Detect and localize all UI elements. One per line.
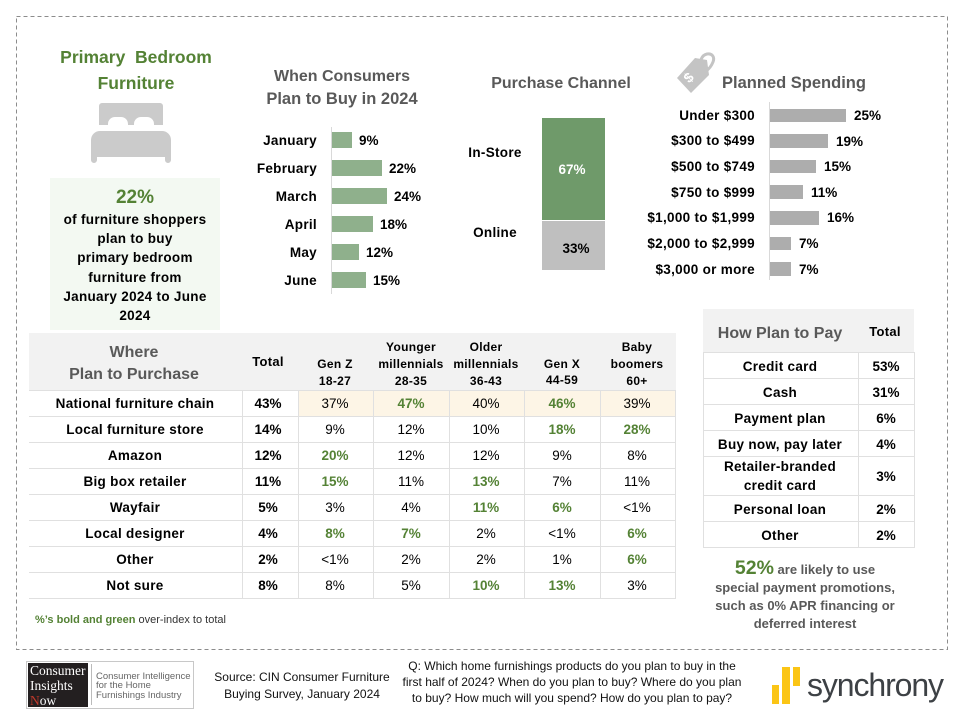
survey question	[403, 659, 741, 705]
table rows: 12%	[397, 422, 425, 437]
bar chart: planned spending: 25%	[854, 108, 881, 123]
table rows: 3%	[627, 578, 647, 593]
table rows: 11%	[255, 474, 281, 489]
bar chart: when consumers plan to buy: 12%	[366, 245, 393, 260]
bar chart: when consumers plan to buy: April	[285, 217, 317, 232]
survey question: Q: Which home furnishings products do you plan to buy in the	[408, 659, 736, 673]
bar chart: when consumers plan to buy	[257, 127, 421, 294]
table rows: 46%	[548, 396, 576, 411]
source note: Source: CIN Consumer Furniture	[214, 670, 390, 684]
column headers: millennials	[378, 357, 444, 371]
table: how plan to pay	[703, 309, 914, 548]
table rows: 2%	[258, 552, 278, 567]
column headers: Older	[470, 340, 502, 354]
table heading: Plan to Purchase	[69, 366, 199, 383]
callout: 52% likely to use promotions: deferred interest	[754, 616, 857, 631]
callout: 22% of furniture shoppers: primary bedroom	[77, 250, 193, 265]
table rows: 8%	[325, 526, 345, 541]
logo: consumer insights now: for the Home	[96, 680, 151, 691]
bar chart: when consumers plan to buy: 9%	[359, 133, 379, 148]
bar chart: when consumers plan to buy: June	[284, 273, 317, 288]
source note: Buying Survey, January 2024	[224, 687, 380, 701]
table rows: 2%	[401, 552, 421, 567]
bar chart: planned spending	[647, 102, 881, 280]
column headers: Baby	[622, 340, 652, 354]
callout: 22% of furniture shoppers: January 2024 to June	[63, 289, 207, 304]
table rows: National furniture chain	[56, 396, 214, 411]
bar chart: planned spending: 11%	[811, 185, 837, 200]
table rows: 9%	[325, 422, 345, 437]
table rows: 12%	[397, 448, 425, 463]
stacked bar chart: purchase channel: 67%	[558, 162, 586, 177]
table rows: Wayfair	[110, 500, 161, 515]
source note	[214, 670, 390, 701]
callout: 22% of furniture shoppers: plan to buy	[97, 231, 173, 246]
table rows: 13%	[548, 578, 576, 593]
bar chart: planned spending: 7%	[799, 236, 819, 251]
bar chart: when consumers plan to buy: January	[263, 133, 317, 148]
table rows: Local furniture store	[66, 422, 204, 437]
table: how plan to pay: 53%	[872, 359, 900, 374]
bar chart: when consumers plan to buy: 24%	[394, 189, 421, 204]
table: how plan to pay: 2%	[876, 502, 896, 517]
table: how plan to pay: Buy now, pay later	[718, 437, 843, 452]
table rows: 8%	[627, 448, 647, 463]
table: where plan to purchase	[29, 333, 676, 598]
logo: consumer insights now: Consumer Intelligence	[96, 671, 191, 682]
column headers: 36-43	[470, 374, 502, 388]
callout: 52% likely to use promotions: 52% are likely to use	[735, 557, 875, 579]
table rows: 18%	[548, 422, 576, 437]
bar chart: when consumers plan to buy: March	[276, 189, 317, 204]
column headers: boomers	[611, 357, 663, 371]
title: primary bedroom furniture	[60, 47, 212, 93]
table rows: 6%	[627, 552, 647, 567]
icon: price tag: $	[680, 69, 697, 86]
column headers: 28-35	[395, 374, 427, 388]
table rows: 14%	[254, 422, 282, 437]
table: how plan to pay: Credit card	[743, 359, 817, 374]
column headers: Total	[252, 354, 284, 369]
heading: when consumers plan to buy: When Consumers	[274, 68, 410, 85]
table: how plan to pay: Other	[761, 528, 799, 543]
table: how plan to pay: Cash	[763, 385, 797, 400]
table rows: 47%	[397, 396, 425, 411]
bar chart: planned spending: $750 to $999	[671, 185, 755, 200]
table rows: 8%	[325, 578, 345, 593]
callout: 22% of furniture shoppers	[50, 178, 220, 330]
table rows: 43%	[254, 396, 282, 411]
bar chart: planned spending: $500 to $749	[671, 159, 755, 174]
table rows: 6%	[552, 500, 572, 515]
heading: when consumers plan to buy	[266, 68, 418, 108]
callout: 22% of furniture shoppers: of furniture shoppers	[64, 212, 206, 227]
table: how plan to pay: How Plan to Pay	[718, 325, 842, 342]
bar chart: planned spending: 7%	[799, 262, 819, 277]
stacked bar chart: purchase channel	[468, 118, 605, 270]
callout: 22% of furniture shoppers: 2024	[119, 308, 151, 323]
heading: planned spending: Planned Spending	[722, 74, 866, 92]
table: how plan to pay: Retailer-branded	[724, 459, 836, 474]
table rows: 12%	[254, 448, 282, 463]
table: how plan to pay: credit card	[744, 478, 816, 493]
bar chart: planned spending: $2,000 to $2,999	[647, 236, 755, 251]
table rows: <1%	[548, 526, 576, 541]
logo: consumer insights now: Consumer	[30, 663, 86, 678]
table: how plan to pay: 4%	[876, 437, 896, 452]
column headers: 44-59	[546, 373, 578, 387]
table rows: 8%	[258, 578, 278, 593]
table note: %’s bold and green over-index to total	[35, 614, 226, 626]
logo: consumer insights now	[26, 662, 194, 708]
table rows: 5%	[401, 578, 421, 593]
column headers	[252, 340, 663, 388]
column headers: Gen X	[544, 357, 580, 371]
table: how plan to pay: 2%	[876, 528, 896, 543]
bar chart: when consumers plan to buy: 22%	[389, 161, 416, 176]
callout: 52% likely to use promotions	[715, 557, 895, 631]
column headers: Younger	[386, 340, 436, 354]
table: how plan to pay: 31%	[872, 385, 900, 400]
table rows: 5%	[258, 500, 278, 515]
stacked bar chart: purchase channel: Online	[473, 225, 517, 240]
table rows: Big box retailer	[83, 474, 187, 489]
table heading: Where	[110, 344, 159, 361]
bar chart: planned spending: $1,000 to $1,999	[647, 210, 755, 225]
column headers: 18-27	[319, 374, 351, 388]
table rows: 11%	[398, 474, 424, 489]
table rows: 37%	[321, 396, 349, 411]
bar chart: when consumers plan to buy: 15%	[373, 273, 400, 288]
callout: 52% likely to use promotions: such as 0% APR financing or	[715, 598, 895, 613]
title: primary bedroom furniture: Furniture	[98, 73, 175, 93]
survey question: first half of 2024? When do you plan to buy? Where do you plan	[403, 675, 741, 689]
callout: 52% likely to use promotions: special payment promotions,	[715, 580, 895, 595]
column headers: 60+	[626, 374, 648, 388]
bar chart: planned spending: $3,000 or more	[655, 262, 755, 277]
table rows: 15%	[321, 474, 349, 489]
survey question: to buy? How much will you spend? How do you plan to pay?	[412, 691, 732, 705]
column headers: millennials	[453, 357, 519, 371]
heading: when consumers plan to buy: Plan to Buy in 2024	[266, 90, 418, 108]
table rows: 6%	[627, 526, 647, 541]
table rows: 1%	[552, 552, 572, 567]
logo: consumer insights now: Furnishings Industry	[96, 690, 182, 701]
table rows: Not sure	[106, 578, 164, 593]
table heading	[69, 344, 199, 383]
table rows: 3%	[325, 500, 345, 515]
bar chart: when consumers plan to buy: May	[290, 245, 317, 260]
icon: bed	[91, 103, 171, 163]
bar chart: when consumers plan to buy: 18%	[380, 217, 407, 232]
table rows: 20%	[321, 448, 349, 463]
table rows: 40%	[472, 396, 500, 411]
table rows: 11%	[624, 474, 650, 489]
heading: purchase channel: Purchase Channel	[491, 75, 631, 92]
table rows: 7%	[552, 474, 572, 489]
table rows: Local designer	[85, 526, 185, 541]
bar chart: when consumers plan to buy: February	[257, 161, 317, 176]
table rows: 13%	[472, 474, 500, 489]
table rows: <1%	[321, 552, 349, 567]
callout: 22% of furniture shoppers: furniture from	[88, 270, 182, 285]
table rows: 7%	[401, 526, 421, 541]
table rows: 10%	[472, 578, 500, 593]
table rows: 4%	[401, 500, 421, 515]
callout: 22% of furniture shoppers: 22%	[116, 187, 154, 208]
column headers: Gen Z	[317, 357, 353, 371]
table rows: Other	[116, 552, 154, 567]
table: how plan to pay: 3%	[876, 469, 896, 484]
bar chart: planned spending: $300 to $499	[671, 133, 755, 148]
table rows: 9%	[552, 448, 572, 463]
bar chart: planned spending: 15%	[824, 159, 851, 174]
table rows	[56, 396, 651, 593]
title: primary bedroom furniture: Primary Bedroom	[60, 47, 212, 67]
table rows: <1%	[623, 500, 651, 515]
table rows: 11%	[473, 500, 499, 515]
table rows: 10%	[472, 422, 500, 437]
table rows: 39%	[623, 396, 651, 411]
table: how plan to pay: Personal loan	[734, 502, 826, 517]
table rows: 2%	[476, 526, 496, 541]
table rows: 28%	[623, 422, 651, 437]
table rows: 12%	[472, 448, 500, 463]
logo: consumer insights now: Insights	[30, 678, 73, 693]
bar chart: planned spending: Under $300	[679, 108, 755, 123]
logo: synchrony: synchrony	[807, 667, 944, 703]
table rows: Amazon	[108, 448, 162, 463]
icon: price tag	[677, 54, 714, 93]
table: how plan to pay: 6%	[876, 411, 896, 426]
bar chart: planned spending: 19%	[836, 134, 863, 149]
logo: consumer insights now: Now	[30, 693, 56, 708]
table rows: 4%	[258, 526, 278, 541]
stacked bar chart: purchase channel: In-Store	[468, 145, 522, 160]
stacked bar chart: purchase channel: 33%	[562, 241, 590, 256]
table rows: 2%	[476, 552, 496, 567]
table: how plan to pay: Payment plan	[734, 411, 826, 426]
bar chart: planned spending: 16%	[827, 210, 854, 225]
table: how plan to pay: Total	[869, 324, 901, 339]
